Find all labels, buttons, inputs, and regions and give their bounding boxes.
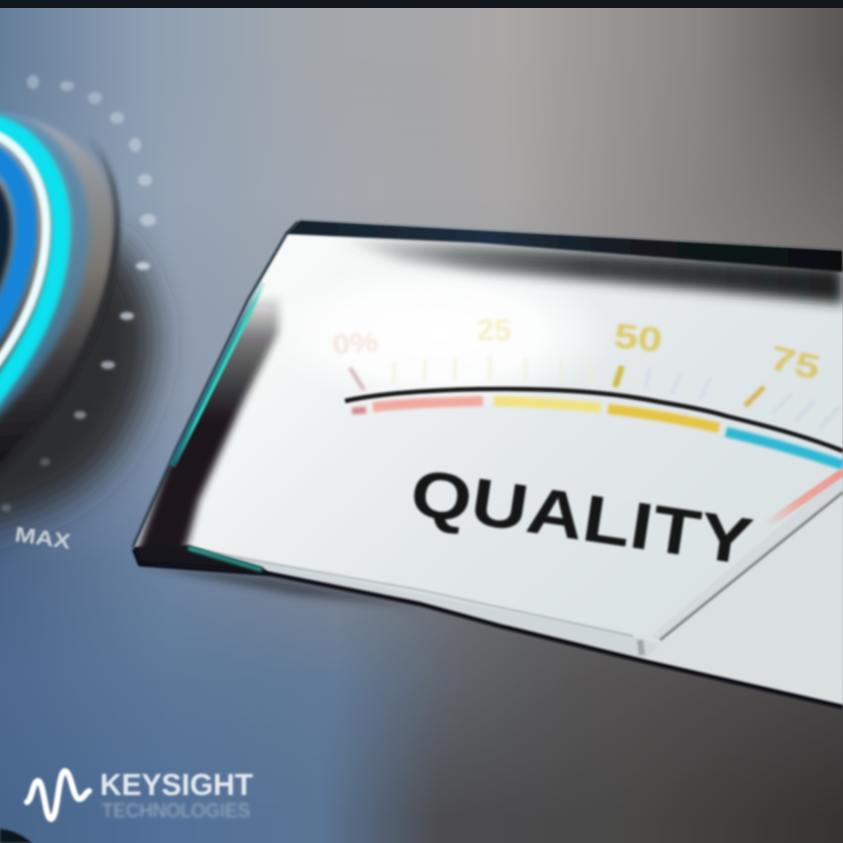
logo subline: TECHNOLOGIES bbox=[102, 801, 250, 822]
label: MAX: MAX bbox=[13, 523, 72, 554]
bottom frame line bbox=[134, 549, 843, 707]
bottom-left corner bbox=[133, 545, 272, 575]
coloured scale arc bbox=[352, 401, 843, 465]
knob dark edge bbox=[0, 136, 117, 480]
number 0%: 0% bbox=[331, 326, 379, 360]
teal reflection bottom bbox=[188, 548, 262, 570]
Keysight logo bbox=[27, 767, 253, 822]
knob centre bbox=[0, 165, 11, 335]
number 75: 75 bbox=[766, 339, 824, 388]
inner gray line bbox=[190, 549, 633, 636]
logo waveform bbox=[27, 771, 89, 819]
top band bbox=[330, 238, 843, 304]
number 25: 25 bbox=[477, 314, 511, 347]
teal reflection left bbox=[172, 282, 264, 466]
face below needle bbox=[842, 494, 843, 706]
heading: QUALITY: QUALITY bbox=[406, 455, 757, 579]
left bevel bbox=[135, 296, 280, 556]
white ring bbox=[0, 128, 46, 398]
outer cyan ring bbox=[0, 122, 61, 425]
face glare bbox=[327, 281, 584, 394]
scale numbers bbox=[331, 314, 824, 388]
meter face bbox=[133, 220, 843, 706]
meter needle bbox=[640, 472, 843, 655]
logo wordmark: KEYSIGHT bbox=[100, 767, 253, 802]
scale ticks bbox=[350, 356, 840, 428]
ring glow bbox=[0, 115, 80, 432]
inner blue glow bbox=[0, 146, 26, 365]
lower band bbox=[214, 551, 656, 658]
dial tick marks bbox=[1, 75, 156, 512]
top frame line bbox=[286, 220, 843, 272]
left frame line bbox=[133, 222, 298, 547]
meter bbox=[133, 220, 843, 707]
number 50: 50 bbox=[612, 317, 664, 360]
knob body bbox=[0, 111, 116, 500]
dial knob with glowing ring bbox=[0, 111, 155, 535]
knob shadow bbox=[0, 240, 155, 535]
meter lower shadow bbox=[140, 566, 420, 607]
black scale arc bbox=[345, 389, 843, 451]
